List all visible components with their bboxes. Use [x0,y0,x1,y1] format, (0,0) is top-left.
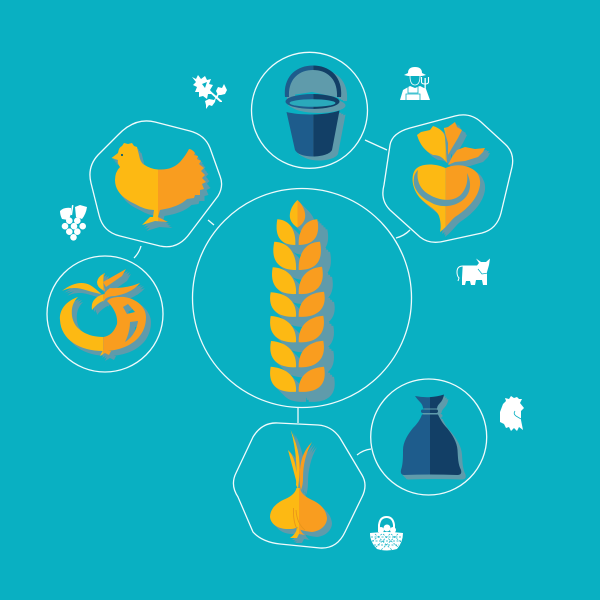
connector: beet to centre [396,230,410,238]
icon: rooster [500,396,524,431]
connector: chicken to centre [208,220,214,225]
icon: basket [370,517,403,550]
panel: bucket circle [252,52,368,168]
outlines and connectors [47,52,513,548]
panel: sack circle [371,379,487,495]
icon: sack [401,394,466,480]
icon: beet [413,122,490,237]
connector: centre to onion [297,408,299,423]
icon: grapes [60,205,87,241]
icon: plant branch [192,75,227,109]
icon: cow [457,258,490,285]
panel: tomato circle [47,256,163,372]
icon: hen [112,143,210,231]
icon: farmer [400,67,430,100]
panel: centre circle [192,188,412,408]
icon: onion [270,430,332,543]
connector: bucket to beet [365,140,387,150]
panel: beet hexagon [383,115,513,242]
icon: tomato [60,269,151,361]
connector: chicken to tomato [134,246,141,258]
icon: wheat ear [270,200,335,402]
connector: onion to sack [357,449,371,455]
panel: chicken hexagon [90,121,222,247]
icon: bucket [285,66,347,160]
panel: onion hexagon [233,423,365,548]
